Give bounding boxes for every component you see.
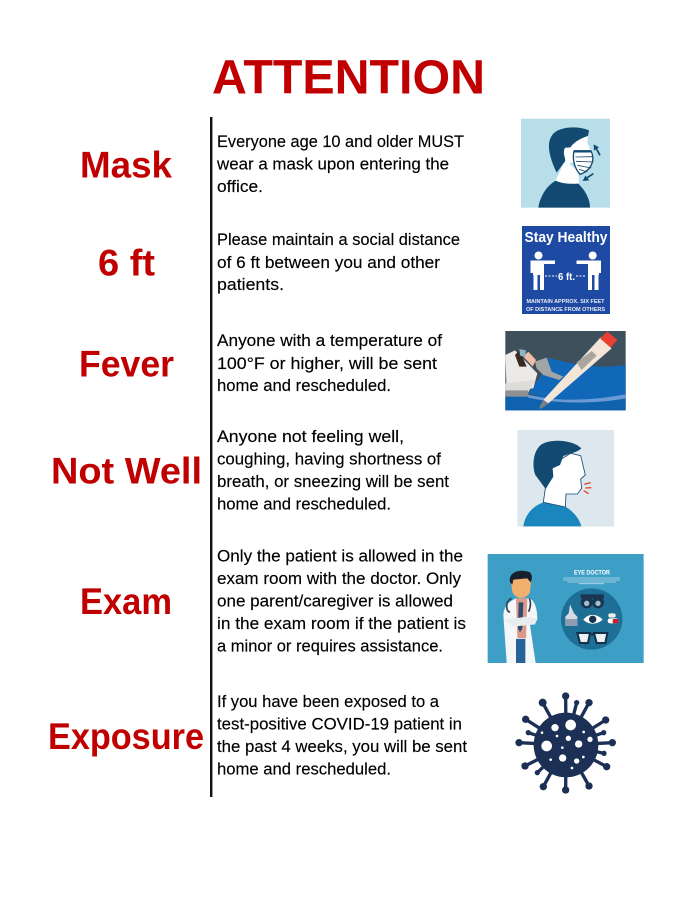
heading: 6 ft: 6 ft (98, 242, 155, 284)
icon: stay healthy sign: OF DISTANCE FROM OTHERS (526, 307, 606, 313)
text: not well rule: Anyone not feeling well, (217, 428, 404, 446)
text: exam rule (217, 548, 466, 656)
icon: stay healthy sign: MAINTAIN APPROX. SIX FEET (526, 299, 604, 305)
text: not well rule: coughing, having shortness of (217, 450, 441, 468)
text: not well rule: home and rescheduled. (217, 496, 391, 514)
icon: man wearing a mask (521, 119, 610, 208)
icon: virus (515, 692, 616, 794)
text: exam rule: exam room with the doctor. Only (217, 570, 462, 588)
icon: stay healthy sign: Stay Healthy (524, 230, 608, 246)
text: exposure rule: If you have been exposed to a (217, 693, 440, 711)
text: mask rule: office. (217, 178, 263, 196)
row: fever (79, 331, 626, 410)
heading: Exam: Exam (80, 581, 172, 622)
text: distance rule: of 6 ft between you and other (217, 254, 441, 272)
icon: stay healthy sign (522, 226, 610, 314)
text: distance rule: patients. (217, 276, 284, 294)
text: mask rule: Everyone age 10 and older MUST (217, 133, 464, 151)
text: mask rule (216, 133, 464, 196)
text: exam rule: in the exam room if the patient is (217, 615, 466, 633)
heading: Exposure: Exposure (48, 716, 204, 757)
text: exam rule: Only the patient is allowed in the (217, 548, 463, 566)
text: exposure rule: the past 4 weeks, you will be sent (217, 738, 467, 756)
icon: eye doctor illustration: EYE DOCTOR (574, 569, 610, 576)
text: exam rule: a minor or requires assistance. (217, 638, 443, 656)
text: fever rule: 100°F or higher, will be sent (217, 355, 437, 373)
heading: Fever: Fever (79, 344, 174, 384)
text: exam rule: one parent/caregiver is allowed (217, 592, 453, 610)
icon: stay healthy sign: 6 ft. (558, 272, 575, 283)
vertical divider line (210, 117, 212, 797)
icon: sick patient with thermometer (505, 331, 626, 410)
text: distance rule (217, 231, 460, 294)
title: ATTENTION (212, 52, 485, 104)
text: exposure rule: test-positive COVID-19 patient in (217, 716, 462, 734)
text: distance rule: Please maintain a social distance (217, 231, 460, 249)
text: fever rule: home and rescheduled. (217, 377, 391, 395)
heading: Not Well: Not Well (51, 450, 202, 492)
icon: person coughing (517, 430, 614, 527)
row: exposure (48, 692, 616, 794)
row: mask (80, 119, 610, 208)
text: exposure rule (217, 693, 467, 778)
row: not well (51, 428, 614, 527)
text: not well rule (217, 428, 449, 514)
text: exposure rule: home and rescheduled. (217, 760, 391, 778)
text: fever rule: Anyone with a temperature of (217, 332, 442, 350)
row: 6 ft (98, 226, 610, 314)
heading: Mask: Mask (80, 144, 172, 186)
row: exam (80, 548, 644, 663)
icon: eye doctor illustration (488, 554, 644, 663)
text: fever rule (217, 332, 442, 395)
text: mask rule: wear a mask upon entering the (216, 156, 449, 174)
text: not well rule: breath, or sneezing will be sent (217, 473, 449, 491)
